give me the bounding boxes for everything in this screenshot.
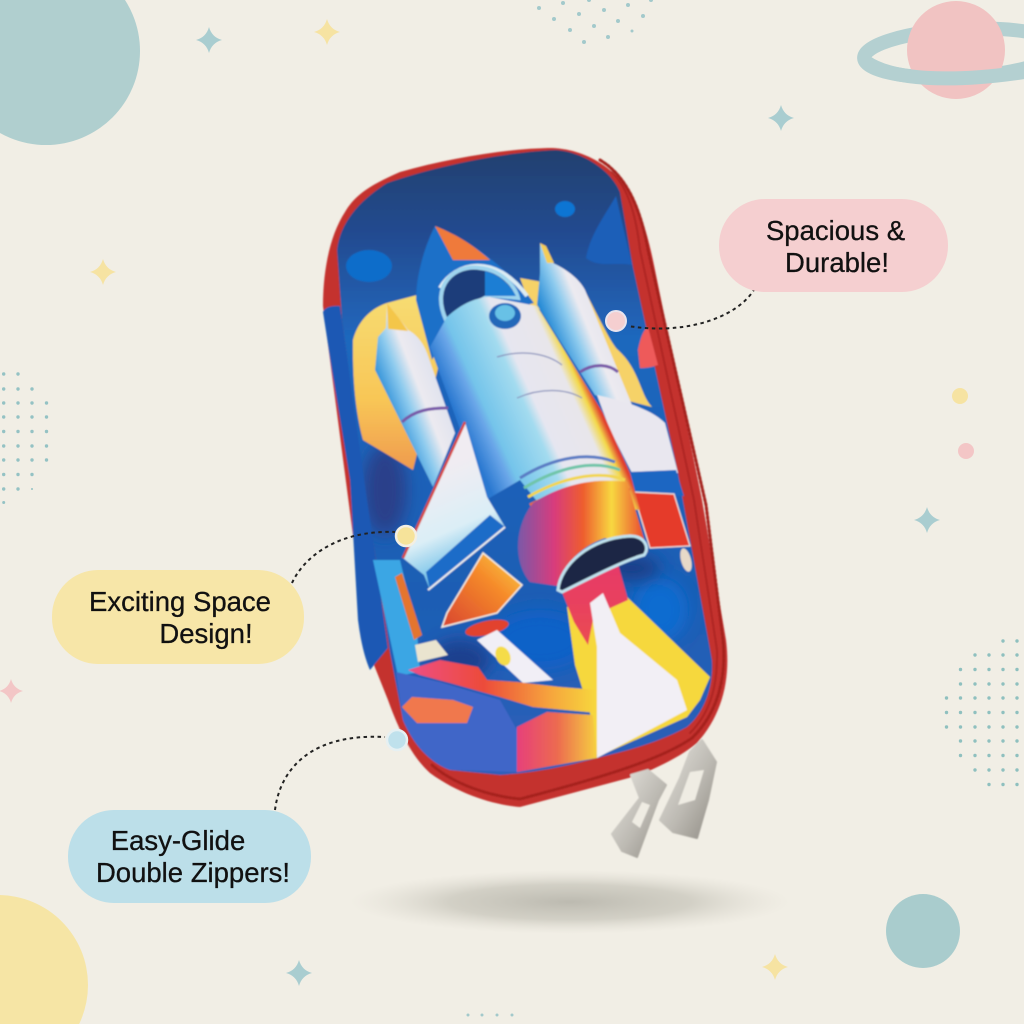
zipper teeth [432,160,724,799]
callout: spacious and durable: Durable! [785,247,889,278]
zipper pull left [612,770,666,857]
floor shadow [350,870,790,934]
decoration: yellow dot [952,388,968,404]
print: moon [353,295,440,470]
main rocket nose [416,226,534,360]
dot grid bottom [466,1014,514,1016]
callout: easy-glide double zippers: Easy-Glide [111,825,245,856]
callout: exciting space design: Design! [159,618,253,649]
rocket window [441,268,518,320]
dot grid left [2,372,48,504]
decoration: yellow circle bottom left [0,895,88,1024]
main rocket body [430,297,640,510]
callout: spacious and durable [719,199,948,292]
rocket hatch [489,303,521,329]
callout: exciting space design: Exciting Space [89,586,271,617]
dot grid right [945,639,1019,786]
flame column [562,560,628,645]
main nozzle [518,481,648,586]
left booster [375,303,455,487]
rocket bands [520,457,630,505]
case face [337,150,712,775]
blue side spine [323,306,388,670]
lower left cone [442,553,522,627]
white flame [590,593,687,758]
connector: zippers [275,730,407,810]
right booster [537,243,632,405]
right wing [597,395,678,473]
left wing [403,422,505,590]
decoration: pink dot [958,443,974,459]
callout: spacious and durable: Spacious & [766,215,905,246]
callout: easy-glide double zippers [68,810,311,903]
pencil case product [323,148,727,857]
connector: spacious [606,282,758,331]
dot grid top [537,0,653,44]
small flame [477,630,553,683]
connector: exciting design [292,526,416,583]
small right engine [678,547,694,573]
callout: exciting space design [52,570,304,664]
blue lower wash [396,672,520,772]
zipper pull right [660,740,716,838]
decoration: teal circle top left [0,0,140,145]
right nozzle [633,492,690,548]
callout: easy-glide double zippers: Double Zippers! [96,857,290,888]
print: blue nebula spots [346,196,658,368]
nozzle bell [558,536,646,592]
launch tower [395,573,448,662]
print: soft background washes [363,445,688,680]
flame glow [567,597,710,757]
red zipper border [323,148,727,807]
print: right glow [520,278,652,407]
light blue launch area [373,560,420,676]
icon: ringed planet [863,1,1024,99]
smoke clouds [402,660,597,772]
decoration: teal circle bottom right [886,894,960,968]
